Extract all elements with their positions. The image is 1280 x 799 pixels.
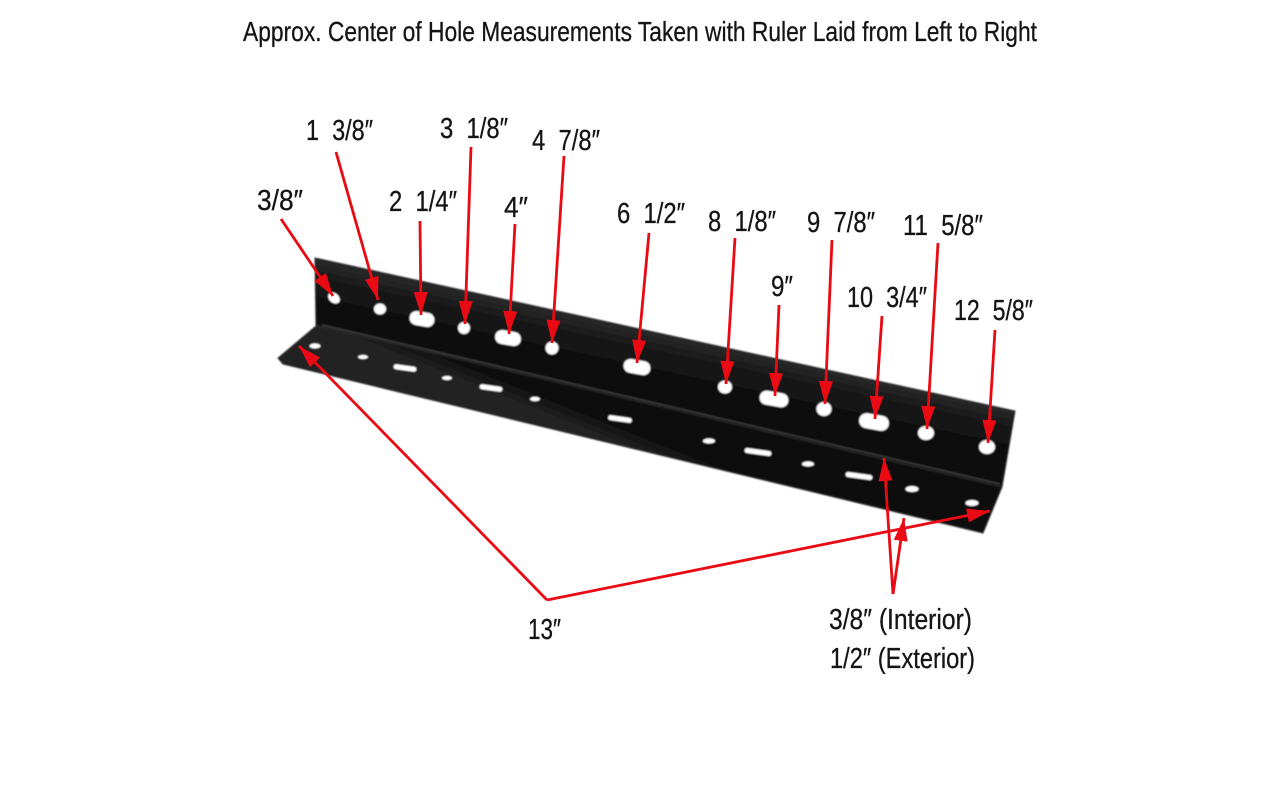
arrow: 9 7/8 bbox=[825, 240, 832, 404]
title: Approx. Center of Hole Measurements Taken with Ruler Laid from Left to Right bbox=[243, 16, 1037, 47]
label: 11 5/8: 11 5/8″ bbox=[903, 210, 983, 242]
label: 9: 9″ bbox=[771, 271, 793, 303]
label: 13: 13″ bbox=[528, 614, 561, 646]
arrow: 4 bbox=[509, 224, 515, 334]
label: 9 7/8: 9 7/8″ bbox=[807, 207, 875, 239]
label: 3/8: 3/8″ bbox=[257, 185, 303, 217]
label: 3 1/8: 3 1/8″ bbox=[440, 113, 508, 145]
label: 12 5/8: 12 5/8″ bbox=[954, 295, 1033, 327]
arrow: 11 5/8 bbox=[927, 243, 938, 429]
arrow: 3/8 bbox=[281, 219, 333, 296]
fold line bbox=[322, 325, 1000, 484]
arrow: 13 to right end bbox=[547, 511, 990, 600]
label: 10 3/4: 10 3/4″ bbox=[847, 282, 927, 314]
label: 6 1/2: 6 1/2″ bbox=[617, 198, 685, 230]
arrow: 12 5/8 bbox=[988, 330, 995, 443]
arrow: 10 3/4 bbox=[875, 316, 882, 419]
label: interior: 3/8″ (Interior) bbox=[829, 604, 972, 636]
arrow: 13 to left end bbox=[299, 346, 547, 600]
bracket bottom flange bbox=[278, 326, 1002, 533]
arrow: 6 1/2 bbox=[637, 233, 649, 363]
arrow: 1 3/8 bbox=[336, 152, 378, 300]
upper row of holes bbox=[326, 290, 995, 454]
label: 8 1/8: 8 1/8″ bbox=[708, 206, 776, 238]
label: exterior: 1/2″ (Exterior) bbox=[830, 643, 975, 675]
arrow: 3 1/8 bbox=[465, 147, 471, 324]
label: 1 3/8: 1 3/8″ bbox=[306, 115, 373, 147]
bracket vertical wall bbox=[315, 258, 1015, 487]
label: 2 1/4: 2 1/4″ bbox=[389, 186, 457, 218]
arrow: exterior thickness bbox=[893, 518, 904, 594]
lower row of holes bbox=[310, 344, 978, 506]
arrow: 9 bbox=[775, 305, 779, 396]
arrow: 8 1/8 bbox=[726, 238, 735, 384]
red arrows bbox=[281, 147, 995, 600]
measurement labels bbox=[257, 113, 1033, 675]
arrow: 4 7/8 bbox=[552, 156, 564, 343]
steel angle bracket bbox=[278, 258, 1015, 533]
label: 4 7/8: 4 7/8″ bbox=[532, 125, 600, 157]
arrow: interior thickness bbox=[884, 458, 893, 594]
label: 4: 4″ bbox=[504, 192, 528, 224]
arrow: 2 1/4 bbox=[420, 221, 421, 315]
